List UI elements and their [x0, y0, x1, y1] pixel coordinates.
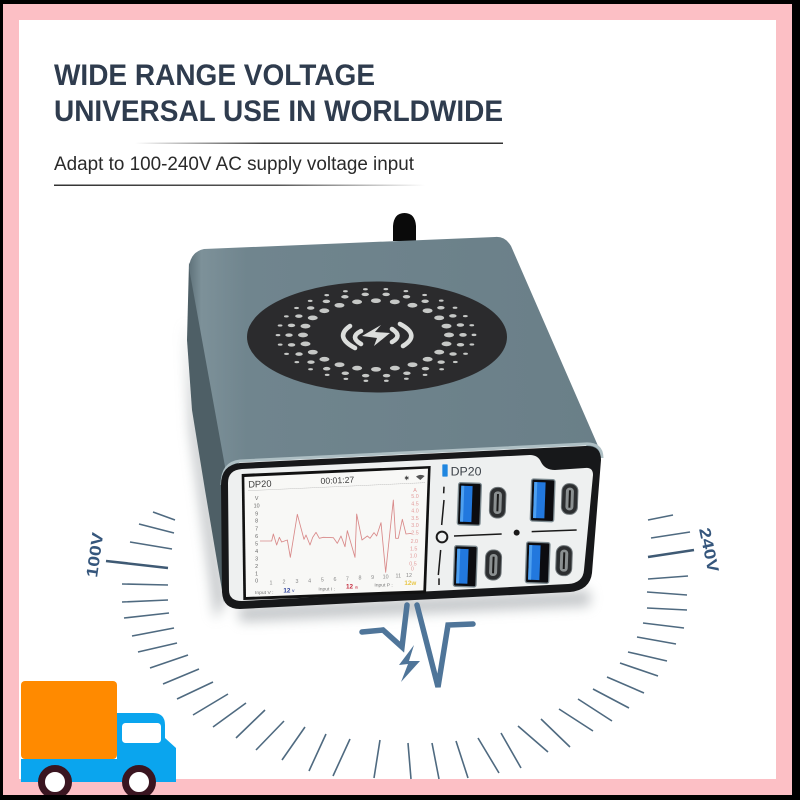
current axis [409, 488, 419, 572]
USB-A port 3 [453, 546, 477, 587]
input readouts: 12 [283, 587, 291, 594]
metal edge highlight [222, 444, 602, 485]
wireless charging pad [247, 282, 507, 392]
current axis: 1.5 [410, 546, 417, 552]
voltage axis: 6 [255, 534, 258, 540]
time axis: 8 [359, 576, 362, 582]
time axis: 1 [270, 580, 273, 586]
current axis: A [413, 488, 417, 494]
current axis: 0 [411, 566, 414, 572]
divider marks [437, 487, 577, 585]
time axis: 5 [321, 578, 324, 584]
input readouts: Input I : [318, 586, 335, 592]
current axis: 4.0 [411, 509, 419, 515]
time axis: 3 [296, 579, 299, 585]
time axis: 7 [346, 576, 349, 582]
current axis: 3.5 [411, 516, 419, 522]
time axis: 10 [383, 574, 389, 580]
time axis: 6 [334, 577, 337, 583]
waveform line chart [260, 500, 412, 572]
USB-A port 2 [530, 479, 555, 522]
title: WIDE RANGE VOLTAGE [54, 59, 375, 92]
voltage axis: 4 [255, 549, 258, 555]
voltage axis: 0 [255, 579, 258, 585]
icon: wireless bolt [343, 324, 411, 348]
voltage axis: 7 [255, 526, 258, 532]
current axis: 2.0 [411, 539, 418, 545]
voltage axis: V [255, 496, 259, 502]
time axis: 11 [396, 574, 401, 580]
device top face [189, 237, 602, 472]
icon: delivery truck [21, 681, 176, 796]
label: 240V: 240V [695, 526, 721, 574]
screen header: ∗ [404, 475, 410, 482]
label: 100V: 100V [84, 531, 107, 579]
USB-A port 4 [525, 542, 550, 583]
front white panel [228, 455, 593, 601]
input readouts [255, 580, 416, 596]
current axis: 5.0 [411, 494, 419, 500]
DP20 brand label: DP20 [451, 464, 482, 478]
voltage axis: 2 [255, 564, 258, 570]
time axis: 4 [308, 578, 311, 584]
current axis: 0.5 [409, 561, 417, 567]
time axis: 12 [406, 573, 412, 579]
front bezel [221, 446, 601, 609]
USB-C port 2 [561, 483, 578, 515]
current axis: 2.5 [411, 530, 419, 536]
charger device [187, 237, 602, 609]
title [54, 59, 503, 128]
title: UNIVERSAL USE IN WORLDWIDE [54, 95, 503, 128]
voltage axis: 8 [255, 519, 258, 525]
screen [242, 466, 431, 600]
time axis: 2 [283, 580, 286, 586]
voltage axis: 5 [255, 541, 258, 547]
input readouts: 12w [404, 580, 416, 587]
voltage axis: 9 [255, 511, 258, 517]
USB-C port 4 [555, 545, 573, 576]
current axis: 3.0 [411, 523, 419, 529]
screen header [248, 475, 425, 491]
input readouts: Input P : [374, 583, 393, 589]
time axis: 9 [371, 575, 374, 581]
voltage dial ticks [106, 512, 694, 779]
voltage axis: 3 [255, 556, 258, 562]
screen header: 00:01:27 [320, 475, 355, 486]
subtitle: Adapt to 100-240V AC supply voltage input [54, 154, 415, 175]
USB-C port 3 [485, 550, 502, 580]
current axis: 4.5 [411, 501, 419, 507]
USB-A port 1 [457, 483, 481, 525]
input readouts: a [355, 584, 358, 590]
voltage axis [254, 496, 260, 585]
icon: voltage pulse with bolt [362, 605, 473, 687]
input readouts: 12 [346, 584, 354, 591]
input readouts: v [292, 588, 295, 594]
device shadow [185, 320, 590, 622]
voltage axis: 1 [255, 571, 258, 577]
input readouts: Input V : [255, 590, 274, 596]
screen header: DP20 [248, 479, 272, 490]
USB-C port 1 [489, 487, 506, 518]
current axis: 1.0 [410, 554, 417, 560]
device left side [187, 262, 228, 602]
icon: antenna [393, 213, 416, 241]
time axis [270, 573, 412, 586]
voltage axis: 10 [254, 504, 260, 510]
